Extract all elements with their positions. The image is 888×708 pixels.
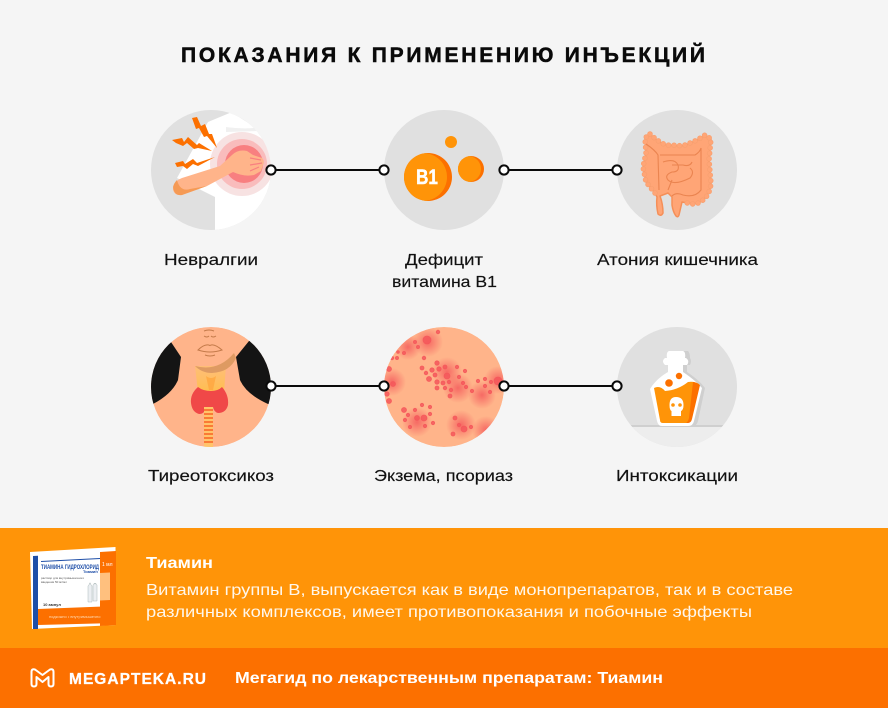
image: medicine box: 10 ампул xyxy=(43,602,61,607)
label: vitamin B1 deficiency: витамина В1 xyxy=(392,274,497,291)
image: medicine box: ТИАМИНА ГИДРОХЛОРИД xyxy=(41,565,100,571)
label: intestinal atony: Атония кишечника xyxy=(597,252,758,269)
text: thiamine description: Витамин группы В, выпускается как в виде монопрепаратов, так и в составе xyxy=(146,582,793,599)
title: ПОКАЗАНИЯ К ПРИМЕНЕНИЮ ИНЪЕКЦИЙ xyxy=(181,43,705,67)
connector: row 2 left xyxy=(266,381,389,391)
connector: row 2 right xyxy=(499,381,622,391)
logo: megapteka mark xyxy=(32,669,54,686)
icon: intestines xyxy=(617,110,737,230)
icon: thyroid xyxy=(151,327,271,447)
icon: vitamin B1: В1 xyxy=(416,166,438,189)
label: intoxications: Интоксикации xyxy=(616,468,738,485)
panel: thiamine info xyxy=(0,528,888,648)
image: medicine box: Тиамин xyxy=(83,569,98,574)
image: medicine box: введения 50 мг/мл xyxy=(41,580,67,584)
image: medicine box xyxy=(30,547,116,629)
label: vitamin B1 deficiency: Дефицит xyxy=(405,252,484,269)
label: eczema, psoriasis: Экзема, псориаз xyxy=(374,468,513,485)
heading: thiamine: Тиамин xyxy=(146,555,213,572)
image: medicine box: раствор для внутримышечного xyxy=(41,576,84,580)
icon: eczema xyxy=(384,327,504,447)
icon: poison bottle xyxy=(617,327,737,452)
text: thiamine description: различных комплексов, имеет противопоказания и побочные эффекты xyxy=(146,604,752,621)
connector: row 1 right xyxy=(499,165,622,175)
connector: row 1 left xyxy=(266,165,389,175)
icon: vitamin B1 xyxy=(384,110,504,230)
logo: wordmark: MEGAPTEKA.RU xyxy=(69,671,206,688)
image: medicine box: подкожно • внутримышечно xyxy=(49,614,101,619)
image: medicine box: 1 мл xyxy=(102,562,113,568)
footer xyxy=(0,648,888,708)
text: footer caption: Мегагид по лекарственным препаратам: Тиамин xyxy=(235,670,663,687)
label: thyrotoxicosis: Тиреотоксикоз xyxy=(148,468,274,485)
icon: neuralgia xyxy=(151,110,270,230)
label: neuralgia: Невралгии xyxy=(164,252,258,269)
